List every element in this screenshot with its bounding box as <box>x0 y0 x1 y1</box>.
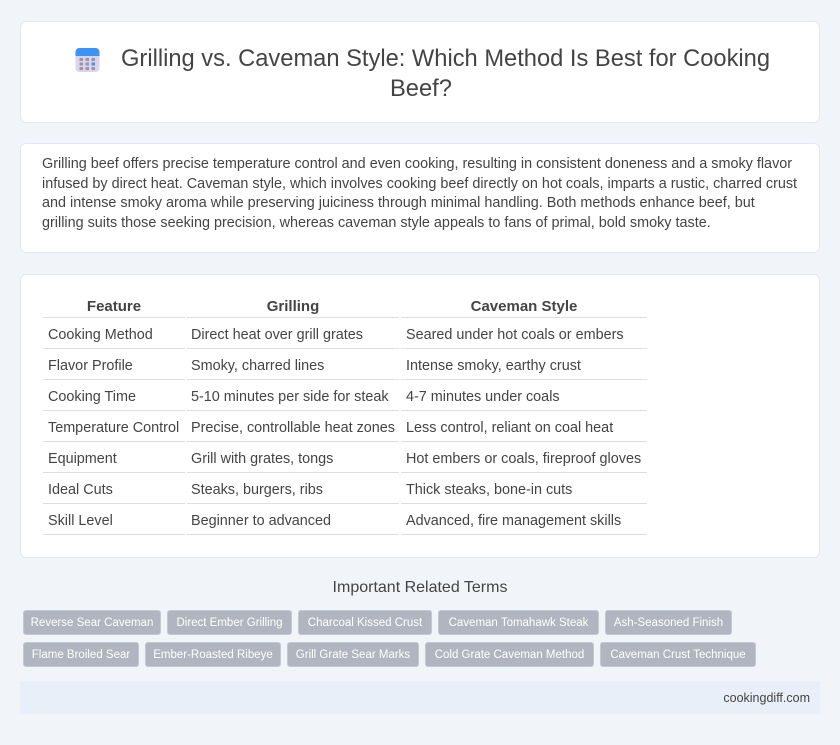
row: Temperature Control: Precise, controllable heat zones <box>191 420 395 436</box>
tag: Caveman Crust Technique <box>610 649 746 661</box>
row: Temperature Control: Temperature Control <box>48 420 179 436</box>
tag <box>605 610 732 635</box>
row: Ideal Cuts: Steaks, burgers, ribs <box>191 482 323 498</box>
tag <box>23 610 161 635</box>
comparison table <box>43 298 647 535</box>
footer bar <box>20 681 820 714</box>
tag: Direct Ember Grilling <box>176 617 283 629</box>
row: Cooking Time: Cooking Time <box>48 389 136 405</box>
tag: Grill Grate Sear Marks <box>296 649 410 661</box>
tag: Reverse Sear Caveman <box>31 617 153 629</box>
footer source text: cookingdiff.com <box>723 691 810 705</box>
row: Flavor Profile: Flavor Profile <box>48 358 133 374</box>
row: Temperature Control: Less control, reliant on coal heat <box>406 420 613 436</box>
row: Cooking Method: Direct heat over grill grates <box>191 327 363 343</box>
tag: Flame Broiled Sear <box>32 649 130 661</box>
row: Equipment: Hot embers or coals, fireproof gloves <box>406 451 641 467</box>
tag: Caveman Tomahawk Steak <box>449 617 588 629</box>
column header: Grilling: Grilling <box>267 298 319 315</box>
icon: calendar <box>76 48 100 72</box>
title <box>121 46 770 102</box>
row: Temperature Control <box>48 420 614 436</box>
panel: introduction <box>20 143 820 253</box>
row: Cooking Method <box>48 327 624 343</box>
title: Beef? <box>390 76 452 102</box>
tag: Charcoal Kissed Crust <box>308 617 422 629</box>
intro text: grilling suits those seeking precision, whereas caveman style appeals to fans of primal, bold smoky taste. <box>42 215 711 231</box>
title: Grilling vs. Caveman Style: Which Method Is Best for Cooking <box>121 46 770 72</box>
row: Skill Level <box>48 513 621 529</box>
row: Cooking Time: 5-10 minutes per side for steak <box>191 389 389 405</box>
row: Ideal Cuts: Ideal Cuts <box>48 482 113 498</box>
tag <box>23 642 139 667</box>
row: Cooking Time: 4-7 minutes under coals <box>406 389 560 405</box>
row: Cooking Method: Cooking Method <box>48 327 153 343</box>
row: Cooking Method: Seared under hot coals or embers <box>406 327 624 343</box>
intro text <box>42 156 797 231</box>
tag <box>600 642 756 667</box>
intro text: Grilling beef offers precise temperature control and even cooking, resulting in consistent doneness and a smoky flavor <box>42 156 792 172</box>
tag <box>425 642 594 667</box>
row: Equipment <box>48 451 641 467</box>
row: Flavor Profile: Smoky, charred lines <box>191 358 324 374</box>
tag: Cold Grate Caveman Method <box>435 649 584 661</box>
heading: related terms: Important Related Terms <box>333 579 507 596</box>
tag: Ash-Seasoned Finish <box>614 617 723 629</box>
panel: title card <box>20 21 820 123</box>
row: Ideal Cuts: Thick steaks, bone-in cuts <box>406 482 572 498</box>
panel: comparison table <box>20 274 820 558</box>
intro text: and intense smoky aroma while preserving juiciness through minimal handling. Both methods enhance beef, but <box>42 195 755 211</box>
row: Flavor Profile <box>48 358 581 374</box>
row: Skill Level: Skill Level <box>48 513 113 529</box>
intro text: infused by direct heat. Caveman style, which involves cooking beef directly on hot coals, imparts a rustic, charred crust <box>42 176 797 192</box>
row: Skill Level: Beginner to advanced <box>191 513 331 529</box>
tag <box>167 610 292 635</box>
row: Skill Level: Advanced, fire management skills <box>406 513 621 529</box>
tag <box>298 610 432 635</box>
related term tags <box>23 610 756 667</box>
row: Equipment: Grill with grates, tongs <box>191 451 333 467</box>
row: Flavor Profile: Intense smoky, earthy crust <box>406 358 581 374</box>
column header: Feature: Feature <box>87 298 141 315</box>
tag <box>145 642 281 667</box>
tag <box>287 642 419 667</box>
row: Cooking Time <box>48 389 560 405</box>
column header: Caveman Style: Caveman Style <box>471 298 577 315</box>
tag <box>438 610 599 635</box>
row: Equipment: Equipment <box>48 451 117 467</box>
row: Ideal Cuts <box>48 482 572 498</box>
tag: Ember-Roasted Ribeye <box>153 649 273 661</box>
